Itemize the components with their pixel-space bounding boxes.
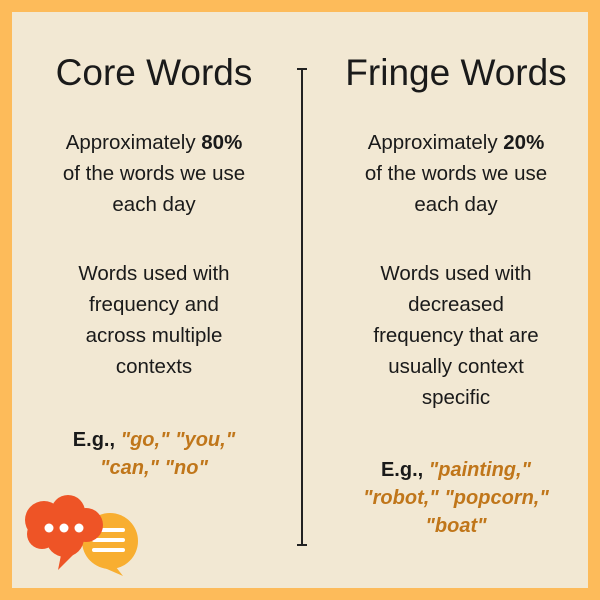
text: description: specific — [422, 386, 490, 409]
icon: chat bubbles — [25, 495, 138, 576]
examples: E.g., "painting," — [381, 459, 531, 481]
column: fringe words — [345, 52, 567, 537]
text: description: contexts — [116, 355, 192, 378]
divider — [301, 68, 303, 546]
examples: E.g., "go," "you," — [73, 429, 235, 451]
examples: "boat" — [425, 515, 487, 537]
text: 20%: Approximately 20% — [368, 131, 544, 154]
text: 20%: each day — [414, 193, 498, 216]
text: description: Words used with — [380, 262, 532, 285]
text: 80% — [63, 131, 245, 216]
text: description — [78, 262, 230, 378]
examples — [73, 429, 236, 479]
title: Fringe Words: Fringe Words — [345, 52, 567, 93]
text: description — [373, 262, 539, 409]
text: 80%: Approximately 80% — [66, 131, 242, 154]
text: 80%: each day — [112, 193, 196, 216]
text: 80%: of the words we use — [63, 162, 245, 185]
examples — [363, 459, 549, 537]
examples: "robot," "popcorn," — [363, 487, 549, 509]
text: description: across multiple — [86, 324, 222, 347]
text: description: usually context — [388, 355, 524, 378]
text: description: Words used with — [78, 262, 230, 285]
text: description: frequency that are — [373, 324, 539, 347]
text: description: decreased — [408, 293, 504, 316]
text: 20% — [365, 131, 547, 216]
title: Core Words: Core Words — [56, 52, 252, 93]
examples: "can," "no" — [100, 457, 208, 479]
text: 20%: of the words we use — [365, 162, 547, 185]
column: core words — [56, 52, 252, 479]
text: description: frequency and — [89, 293, 219, 316]
